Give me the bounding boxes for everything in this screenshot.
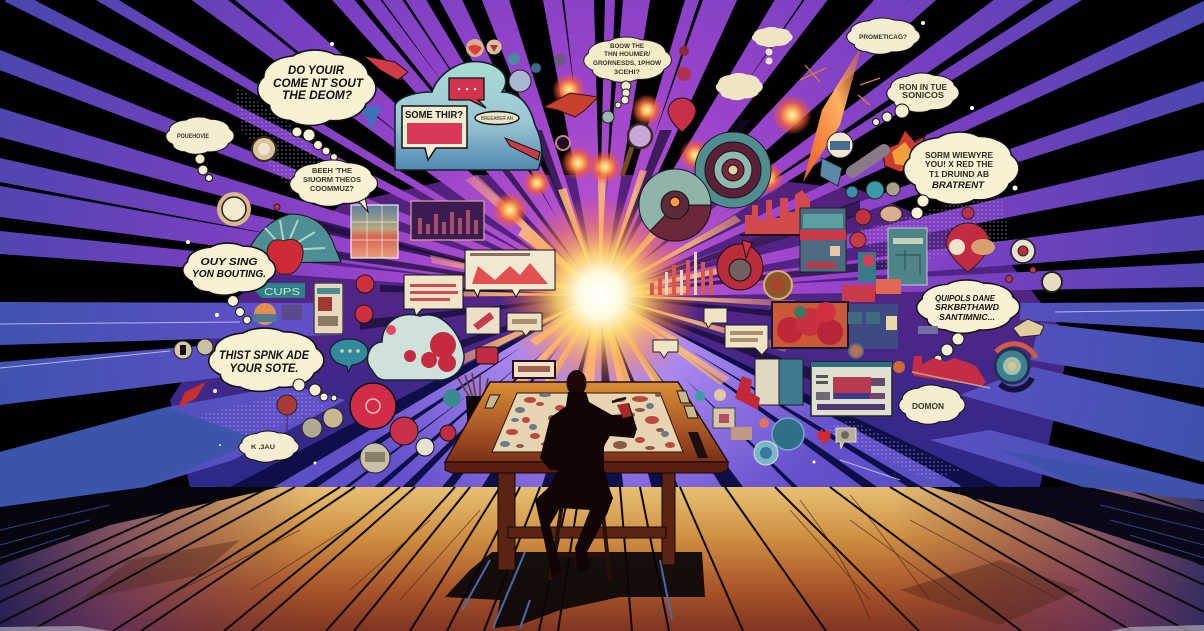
desk front edge bbox=[445, 462, 728, 473]
navy base below the burst bbox=[230, 295, 1000, 487]
stool bbox=[550, 505, 610, 580]
red pin with face bbox=[946, 223, 995, 272]
icon: white circle with card bbox=[827, 132, 853, 158]
drafting desk bbox=[445, 382, 728, 570]
report panel bbox=[811, 362, 892, 416]
speech bubble: been the bbox=[290, 160, 377, 212]
central light burst bbox=[415, 170, 795, 404]
desk left leg bbox=[498, 473, 515, 570]
book icon bbox=[1013, 319, 1044, 337]
red bars chart upper right bbox=[740, 190, 812, 236]
red gauge circle bbox=[717, 240, 763, 290]
thought bubble: top centre: BOOW THE bbox=[610, 43, 645, 50]
speech bubble: been the: SIUORM THEOS bbox=[303, 175, 361, 184]
icon: magnifier bbox=[622, 124, 652, 176]
table panel bbox=[351, 205, 398, 258]
hand with pen bbox=[612, 398, 632, 418]
speech box: some thing: SOME THIR? bbox=[405, 110, 463, 121]
right dashboard panel bbox=[800, 208, 846, 272]
icon: red pin bbox=[668, 98, 696, 132]
speech bubble: large right: SORM WIEWYRE bbox=[925, 150, 993, 160]
blue and lavender rays below the burst bbox=[277, 295, 960, 487]
red bar chart lower right bbox=[912, 356, 990, 388]
blank clouds bbox=[716, 27, 793, 100]
icon: small bubbles top bbox=[508, 53, 566, 92]
sparks near comet bbox=[800, 65, 880, 105]
desk surface bbox=[445, 382, 728, 462]
note on dark tag bbox=[513, 361, 555, 378]
speech bubble: this spark: THIST SPNK ADE bbox=[219, 350, 309, 362]
CUPS banner: CUPS bbox=[264, 287, 300, 298]
thought bubble: top right bbox=[847, 18, 920, 54]
thought bubble: row in the: RON IN TUE bbox=[899, 83, 948, 92]
sparkles bbox=[186, 21, 1018, 464]
blue reflected streaks on the floor bbox=[462, 552, 672, 628]
pen cup with brushes bbox=[454, 373, 488, 457]
speech box: some thing bbox=[402, 106, 467, 160]
speech bubble: do your comment bbox=[258, 50, 376, 160]
red icon tile bbox=[476, 347, 498, 364]
speech bubble: large right: T1 DRUIND AB bbox=[929, 169, 989, 179]
speech icon: red bbox=[449, 78, 486, 108]
big cloud with speech boxes bbox=[395, 62, 542, 170]
halftone patches bbox=[180, 85, 1010, 480]
thought bubble: domon: DOMON bbox=[912, 402, 944, 411]
wall band at the right edge bbox=[1000, 450, 1204, 500]
red dots bbox=[274, 204, 374, 323]
icon: small rings bbox=[556, 46, 691, 150]
thought bubble: domon bbox=[899, 385, 965, 424]
phone bbox=[314, 283, 343, 334]
teal speech icon bbox=[330, 339, 368, 372]
fruit panel bbox=[772, 302, 848, 348]
head bbox=[566, 370, 586, 396]
speech bubble: this spark bbox=[209, 328, 337, 401]
red pin lower left bbox=[277, 395, 297, 432]
speech bubble: do your comment: COME NT SOUT bbox=[273, 76, 365, 90]
big red at-sign button bbox=[350, 383, 396, 429]
speech bubble: right lower bbox=[917, 280, 1020, 369]
thought bubble: small left bbox=[166, 117, 234, 182]
purple rays radiating from the centre, upper and sides bbox=[0, 0, 1204, 295]
target bbox=[695, 132, 771, 208]
icon: ring medallion bbox=[252, 137, 276, 161]
teal ringed circles bbox=[695, 389, 804, 465]
speech bubble: large right: YOU! X RED THE bbox=[925, 159, 993, 169]
teal window panel bbox=[888, 228, 927, 285]
desk crossbar bbox=[508, 527, 666, 538]
capsule icon bbox=[852, 150, 884, 172]
small round icons right bbox=[846, 181, 1062, 292]
light streak lines bbox=[0, 310, 1204, 480]
thought bubble: top centre: 3CEHI? bbox=[614, 69, 640, 76]
speech bubble: this spark: YOUR SOTE. bbox=[230, 363, 298, 375]
text box bbox=[404, 275, 463, 316]
oval label bbox=[475, 112, 519, 124]
dark streaks across the central haze bbox=[300, 120, 900, 392]
icon: rocket top left bbox=[364, 56, 408, 80]
red pencil bbox=[505, 138, 540, 160]
speech bubble: guy sing: OUY SING bbox=[200, 257, 258, 268]
thought bubble: top centre: THN HOUMER/ bbox=[604, 51, 650, 58]
flame comet bbox=[803, 45, 862, 182]
icon: apple bbox=[267, 239, 303, 274]
speech bubble: been the: BEEH 'THE bbox=[312, 166, 352, 175]
thought bubble: row in the: SONICOS bbox=[902, 91, 945, 100]
blocks bbox=[842, 252, 901, 349]
thought bubble: lower left: K .3AU bbox=[251, 444, 275, 451]
gold medallion bbox=[764, 271, 792, 299]
oval label: BREEABER AN bbox=[481, 116, 513, 122]
icon: blue star bbox=[360, 106, 382, 130]
speech bubble: do your comment: DO YOUIR bbox=[288, 63, 344, 77]
speech bubble: guy sing: YON BOUTING. bbox=[192, 269, 266, 280]
speech bubble: guy sing bbox=[183, 243, 276, 324]
bottom edge strip bbox=[0, 625, 1204, 631]
thought bubble: row in the bbox=[872, 73, 959, 126]
tilted card bbox=[820, 158, 842, 186]
icon: red lamp bbox=[544, 93, 598, 117]
red area chart panel bbox=[465, 250, 555, 297]
thought bubble: top centre bbox=[584, 37, 671, 108]
red bracket icon bbox=[735, 376, 760, 410]
heart and chat icons bbox=[817, 428, 856, 448]
icon: orange badge with lines bbox=[253, 303, 302, 325]
raspberry cloud bbox=[367, 314, 464, 380]
orange ball bbox=[893, 361, 905, 373]
speech bubble: do your comment: THE DEOM? bbox=[282, 88, 353, 102]
explosion star bbox=[882, 130, 925, 172]
central purple haze behind the icons bbox=[170, 175, 1070, 487]
wooden floor bbox=[0, 487, 1204, 631]
CUPS banner bbox=[253, 283, 305, 298]
speech bubble: been the: COOMMUZ? bbox=[310, 184, 354, 193]
speech bubble: large right: BRATRENT bbox=[932, 180, 985, 191]
speech notes right bbox=[653, 308, 768, 358]
thought bubble: top centre: GRORNESDS, 1PHOW bbox=[593, 60, 662, 67]
thought bubble: top right: PROMETICAG? bbox=[859, 34, 907, 41]
speech note bbox=[507, 313, 542, 336]
wall band overlapping the floor at the left edge bbox=[0, 407, 260, 507]
icon: round badge bbox=[217, 192, 251, 226]
glowing orbs bbox=[492, 73, 812, 228]
speech bubble: right lower: QUIPOLS DANE bbox=[935, 294, 996, 303]
small medallions bbox=[302, 389, 461, 473]
pie wheel bbox=[639, 169, 711, 241]
square and photo icons bbox=[713, 408, 752, 440]
speech bubble: large right bbox=[904, 132, 1019, 219]
white and red bars centre bbox=[650, 252, 713, 295]
gauge ring bbox=[995, 344, 1036, 390]
shadow on the floor bbox=[445, 552, 705, 628]
speech bubble: right lower: SRKBRTHAWD bbox=[935, 303, 999, 312]
map on desk bbox=[492, 393, 683, 452]
small icon row near the report bbox=[848, 312, 938, 358]
open book panels bbox=[755, 359, 803, 405]
silhouette of the designer bbox=[535, 370, 637, 578]
wide blue bands on both sides of the wall bbox=[0, 302, 1204, 507]
fan and apple bbox=[247, 214, 341, 274]
icon: hearts bbox=[466, 39, 502, 57]
tray right and slots bbox=[688, 432, 708, 458]
red rocket lower left bbox=[178, 382, 206, 408]
small chart box bbox=[411, 201, 484, 240]
thought bubble: small left: POUEHOVIE bbox=[177, 133, 210, 140]
desk right leg bbox=[662, 473, 675, 565]
small picture card bbox=[466, 307, 500, 334]
speech bubble: right lower: SANTIMNIC... bbox=[939, 313, 995, 322]
left icons bbox=[174, 339, 213, 359]
body and legs bbox=[535, 392, 637, 578]
thought bubble: lower left bbox=[239, 431, 299, 462]
